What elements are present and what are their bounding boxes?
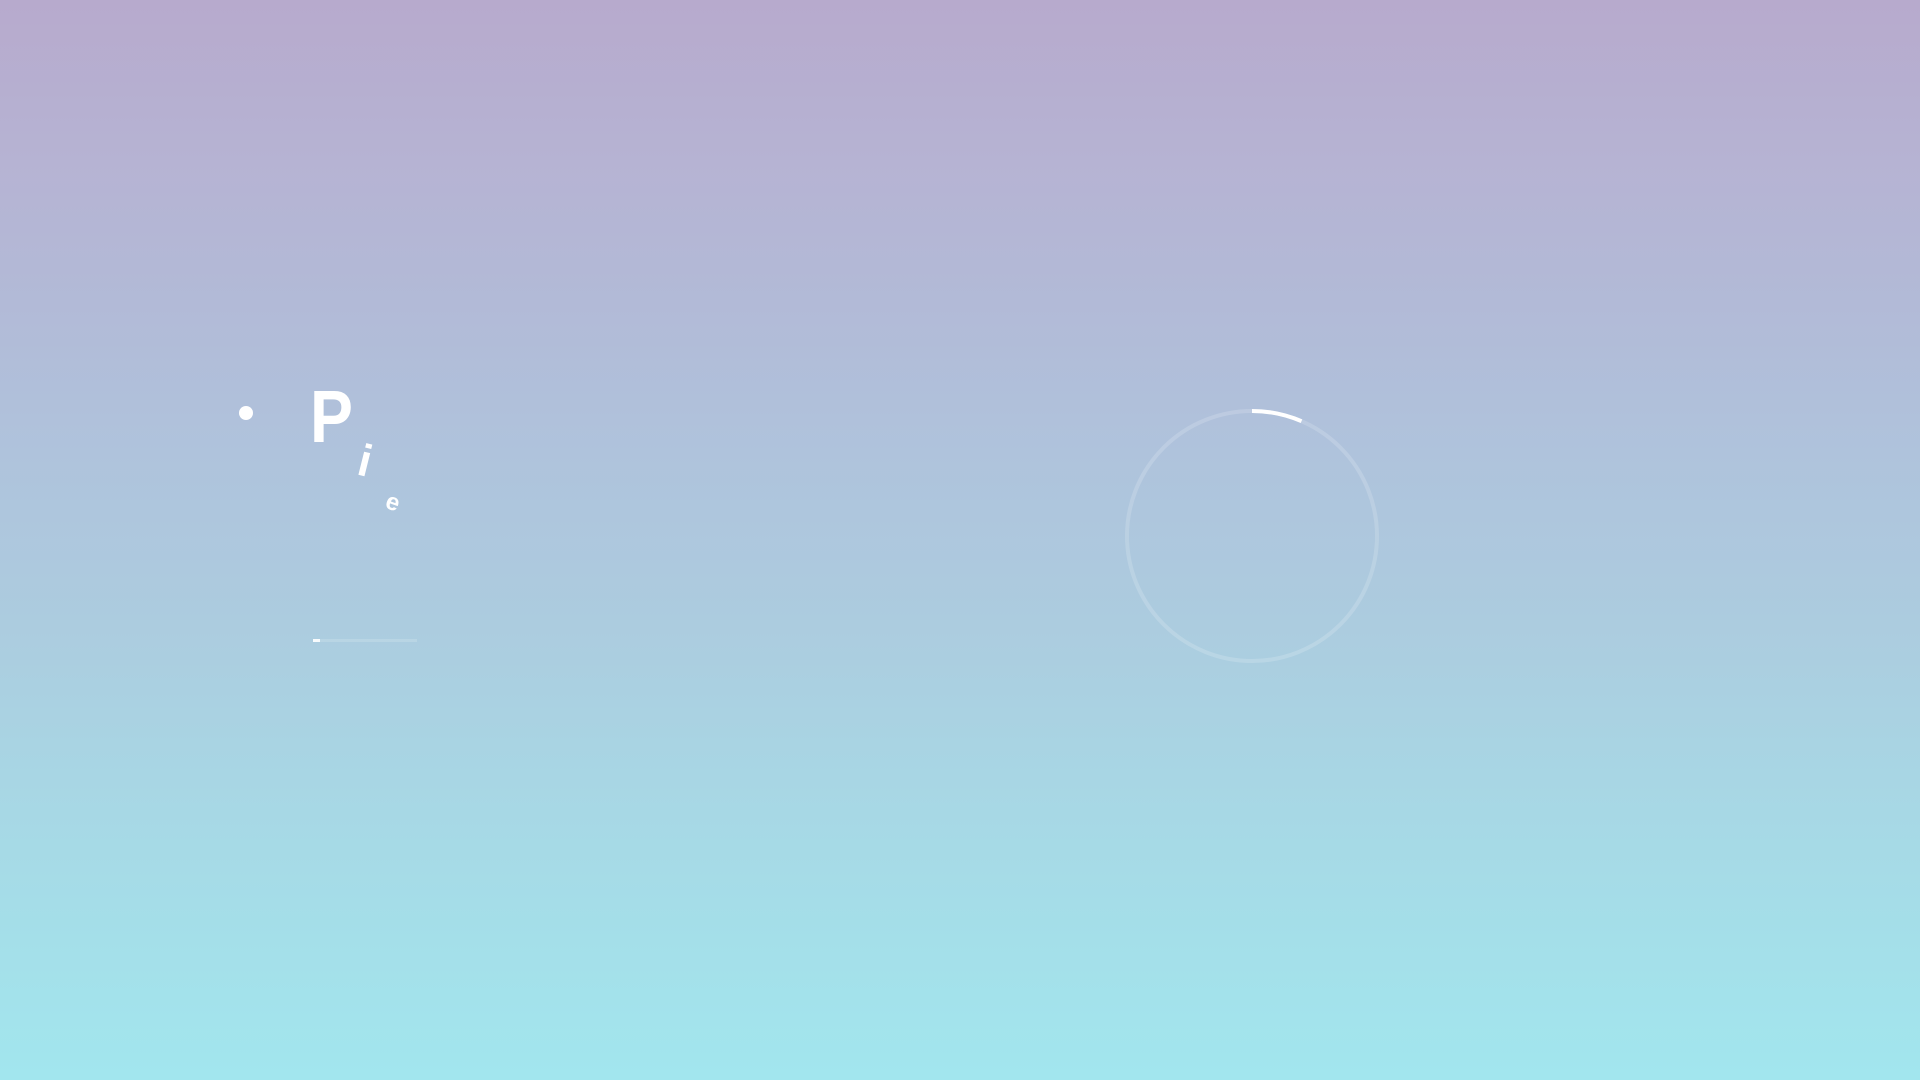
letter e: e: [382, 488, 404, 518]
title: animated letters: [310, 375, 404, 518]
letter i: i: [353, 434, 377, 487]
ring track: [1127, 411, 1377, 661]
circular progress ring: [1125, 409, 1379, 663]
bullet dot: [239, 406, 253, 420]
progress line highlight: [313, 639, 320, 642]
letter P: P: [310, 375, 353, 458]
progress line: [313, 639, 417, 642]
ring highlight arc: [1252, 411, 1302, 421]
